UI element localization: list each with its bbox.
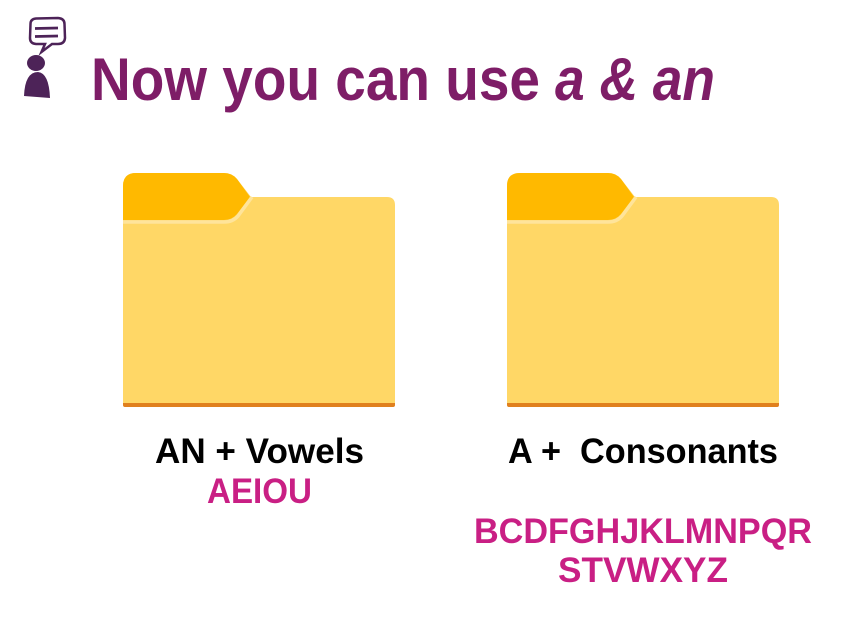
icon: left folder xyxy=(123,173,395,407)
icon: right folder xyxy=(507,173,779,407)
title: a & an xyxy=(555,46,715,113)
consonants list: STVWXYZ xyxy=(558,551,728,590)
left folder label: AN + Vowels xyxy=(155,432,364,471)
title: Now you can use xyxy=(91,46,540,113)
right folder label: A + Consonants xyxy=(508,432,778,471)
vowels list: AEIOU xyxy=(207,472,312,511)
icon: person with speech bubble xyxy=(24,18,65,98)
consonants list xyxy=(474,512,812,590)
consonants list: BCDFGHJKLMNPQR xyxy=(474,512,812,551)
